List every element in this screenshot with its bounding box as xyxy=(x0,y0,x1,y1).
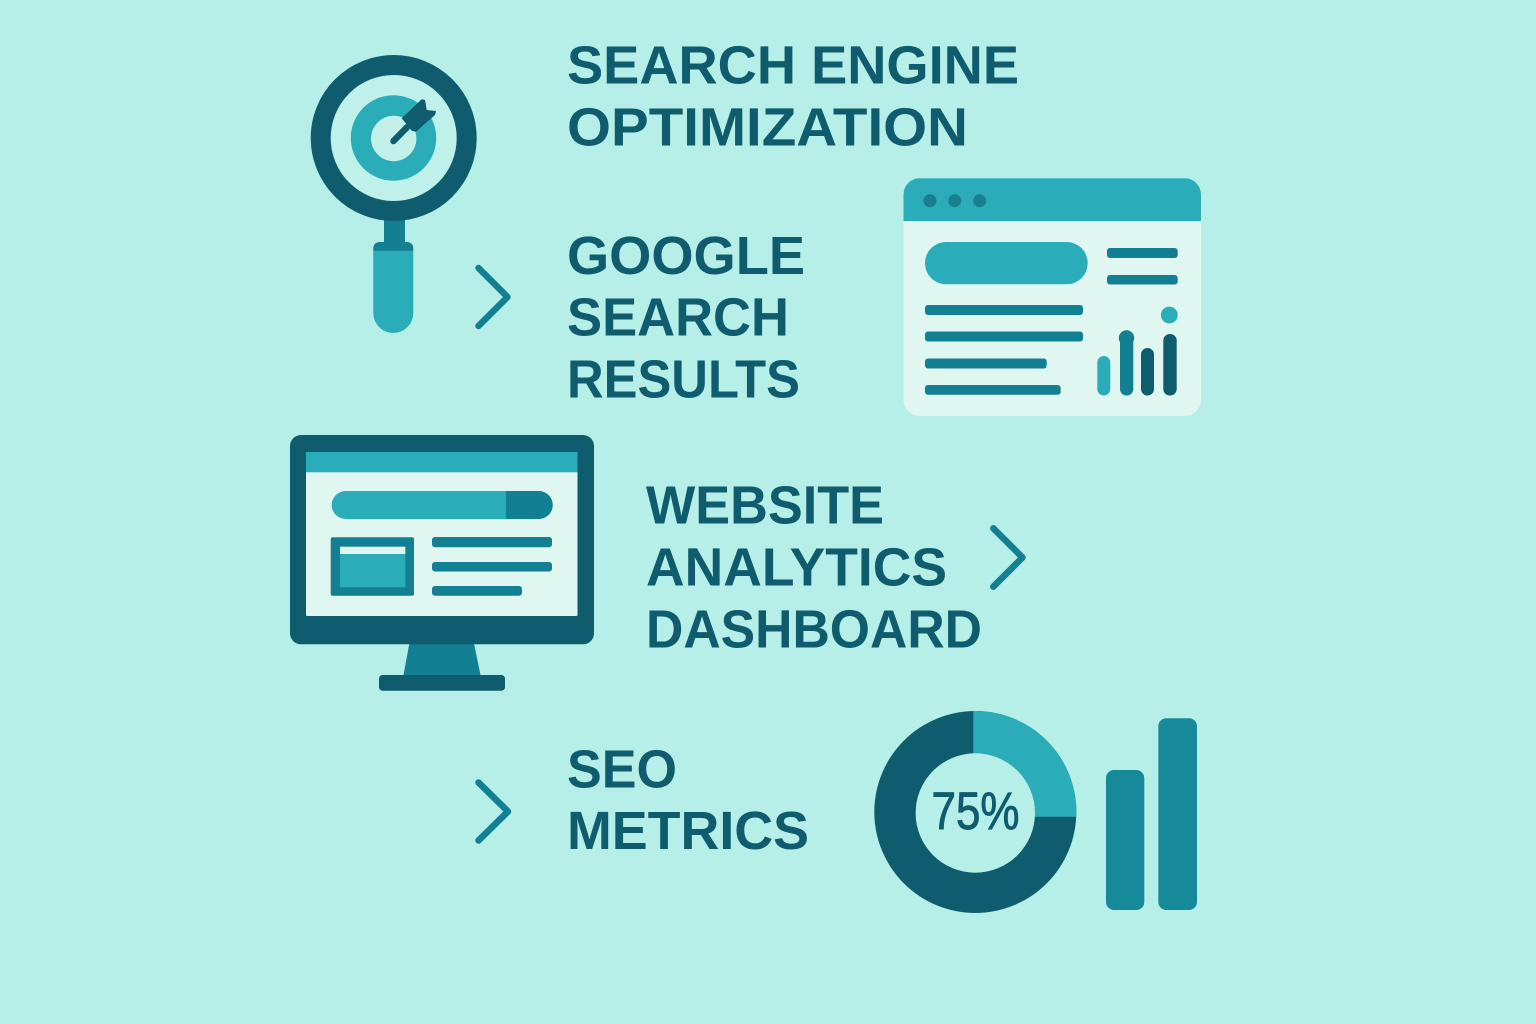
arrow: seo metrics pointer xyxy=(478,782,508,840)
heading: website analytics dashboard: ANALYTICS xyxy=(646,538,947,598)
arrow: to seo metrics xyxy=(993,528,1022,587)
heading: website analytics dashboard xyxy=(646,475,982,660)
heading: seo metrics xyxy=(567,740,809,861)
chart: bars xyxy=(1106,718,1197,910)
heading: search engine optimization xyxy=(567,36,1019,158)
heading: website analytics dashboard: WEBSITE xyxy=(646,475,884,535)
heading: google search results xyxy=(567,226,805,410)
arrow: to google search results xyxy=(478,268,508,326)
heading: google search results: GOOGLE xyxy=(567,226,805,286)
heading: google search results: SEARCH xyxy=(567,288,789,348)
heading: seo metrics: METRICS xyxy=(567,801,809,861)
heading: search engine optimization: SEARCH ENGINE xyxy=(567,36,1019,96)
icon: desktop monitor xyxy=(290,435,594,691)
icon: magnifying glass with target xyxy=(321,65,467,333)
icon: search results browser window xyxy=(904,178,1201,416)
heading: search engine optimization: OPTIMIZATION xyxy=(567,98,968,158)
heading: google search results: RESULTS xyxy=(567,350,800,410)
heading: website analytics dashboard: DASHBOARD xyxy=(646,600,982,660)
chart: 75% donut: 75% xyxy=(932,782,1020,841)
heading: seo metrics: SEO xyxy=(567,740,677,800)
chart: 75% donut xyxy=(874,711,1076,913)
